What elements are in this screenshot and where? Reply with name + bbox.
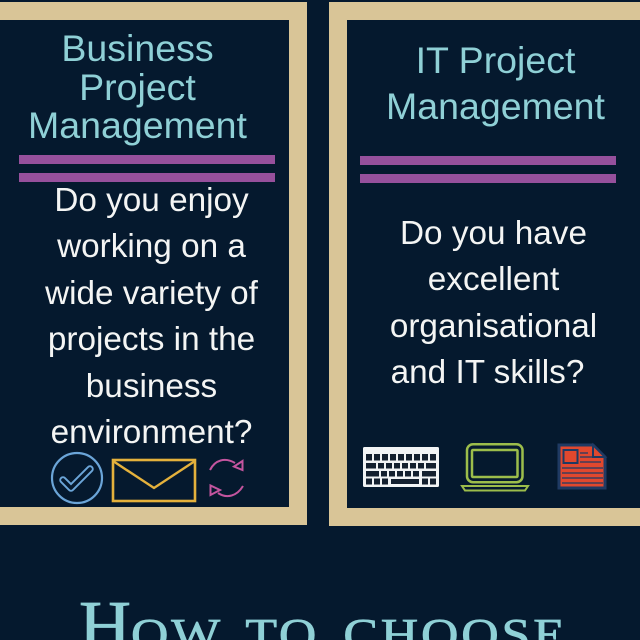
question text: and IT skills? [391,354,584,391]
question text: Do you enjoy [54,182,249,219]
icon: laptop [460,443,530,492]
question text: organisational [390,308,597,345]
icon: document [558,442,608,490]
panel: IT project management [329,2,640,526]
heading: business project management: Business [61,27,214,69]
divider bars [360,156,616,183]
question text [45,182,258,451]
heading: IT project management [386,39,605,127]
question text: Do you have [400,215,587,252]
heading: business project management: Management [28,104,247,146]
question text: wide variety of [45,275,258,312]
icon: keyboard [363,447,439,487]
question text [390,215,597,391]
heading: IT project management: IT Project [416,39,575,81]
panel frame [329,2,640,526]
heading: business project management [28,27,247,146]
icon: refresh arrows [209,458,244,498]
question text: working on a [57,228,246,265]
heading: business project management: Project [79,66,196,108]
icon: envelope [112,458,196,502]
divider bars [19,155,275,182]
question text: projects in the [48,321,255,358]
title: how to choose [79,586,568,640]
question text: business [86,368,217,405]
question text: excellent [428,261,559,298]
question text: environment? [51,414,252,451]
heading: IT project management: Management [386,85,605,127]
panel frame [0,2,307,525]
icon: check mark [50,452,104,504]
panel: business project management [0,2,307,525]
